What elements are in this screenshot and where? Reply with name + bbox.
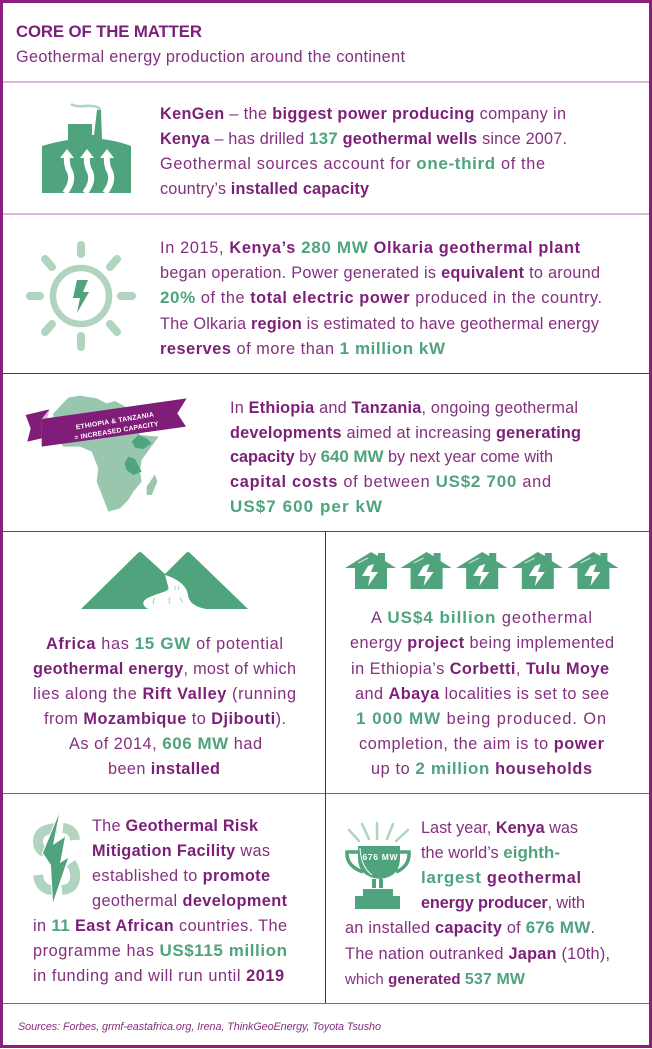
text: KenGen: country’s installed capacity [160, 180, 369, 198]
text: KenGen [160, 105, 567, 198]
text: Olkaria: The Olkaria region is estimated to have geothermal energy [160, 315, 600, 333]
text: Ethiopia and Tanzania: developments aimed at increasing generating [230, 424, 581, 442]
text: Rift Valley: geothermal energy, most of which [33, 660, 296, 678]
ribbon text: ETHIOPIA & TANZANIA [75, 412, 155, 431]
title: CORE OF THE MATTER [16, 22, 202, 41]
text: Rift Valley: been installed [108, 760, 220, 778]
text: Ethiopia project: and Abaya localities is set to see [355, 685, 609, 703]
panel: Risk Mitigation Facility [33, 814, 288, 985]
text: Olkaria: 20% of the total electric power produced in the country. [160, 288, 602, 307]
text: Kenya ranking [344, 819, 610, 988]
text: Kenya ranking: which generated 537 MW [344, 971, 526, 988]
text: Ethiopia and Tanzania: capital costs of between US$2 700 and [230, 472, 551, 491]
icon: five electric houses [345, 552, 618, 589]
text: Risk Mitigation Facility: Mitigation Facility was [92, 842, 270, 860]
text: Rift Valley [33, 634, 296, 778]
subtitle: Geothermal energy production around the continent [16, 48, 405, 66]
text: Kenya ranking: The nation outranked Japan (10th), [345, 945, 610, 963]
ribbon text [72, 411, 160, 442]
text: Ethiopia and Tanzania: In Ethiopia and Tanzania, ongoing geothermal [230, 399, 578, 417]
icon: Africa map with ribbon [26, 396, 187, 512]
sources: Sources: Forbes, grmf-eastafrica.org, Irena, ThinkGeoEnergy, Toyota Tsusho [18, 1021, 381, 1033]
text: Rift Valley: As of 2014, 606 MW had [69, 734, 262, 753]
text: Risk Mitigation Facility: The Geothermal Risk [92, 817, 259, 835]
text: Risk Mitigation Facility: established to promote [92, 867, 270, 885]
ribbon text: = INCREASED CAPACITY [74, 421, 160, 442]
text: Kenya ranking: energy producer, with [421, 894, 585, 912]
title [16, 22, 405, 66]
text: Risk Mitigation Facility: geothermal development [92, 892, 288, 910]
text: Risk Mitigation Facility: programme has US$115 million [33, 941, 287, 960]
text: Kenya ranking: Last year, Kenya was [421, 819, 578, 837]
icon: mountains and river [81, 552, 248, 609]
text: KenGen: Geothermal sources account for one-third of the [160, 154, 545, 173]
text: Ethiopia project: up to 2 million households [371, 759, 592, 778]
text: Ethiopia and Tanzania [230, 399, 581, 516]
icon: trophy [347, 823, 409, 909]
text: Ethiopia project: 1 000 MW being produced. On [356, 709, 606, 728]
text: Ethiopia project: A US$4 billion geothermal [371, 608, 592, 627]
text: Ethiopia project: completion, the aim is to power [359, 735, 605, 753]
icon: sun with bolt [30, 245, 132, 347]
panel: Ethiopia and Tanzania [26, 396, 581, 516]
text: Ethiopia project: energy project being implemented [350, 634, 614, 652]
text: Olkaria: began operation. Power generated is equivalent to around [160, 264, 600, 282]
text: KenGen: KenGen – the biggest power producing company in [160, 105, 566, 123]
text: Kenya ranking: the world’s eighth- [421, 843, 560, 862]
icon: trophy: 676 MW [362, 852, 398, 862]
icon: dollar bolt [38, 814, 75, 902]
text: Risk Mitigation Facility [33, 817, 288, 985]
text: Rift Valley: Africa has 15 GW of potential [46, 634, 283, 653]
panel: Olkaria [30, 238, 602, 358]
text: Olkaria [160, 238, 602, 358]
panel: Rift Valley [33, 552, 296, 778]
panel: Ethiopia project [345, 552, 618, 778]
panel: Kenya ranking [344, 819, 610, 988]
icon: geothermal plant [42, 104, 131, 193]
text: Ethiopia and Tanzania: US$7 600 per kW [230, 497, 383, 516]
text: KenGen: Kenya – has drilled 137 geothermal wells since 2007. [160, 129, 567, 148]
panel: KenGen [42, 104, 567, 198]
text: Ethiopia project [350, 608, 614, 778]
text: Ethiopia project: in Ethiopia’s Corbetti, Tulu Moye [351, 660, 609, 678]
text: Kenya ranking: largest geothermal [421, 868, 581, 887]
text: Risk Mitigation Facility: in 11 East African countries. The [33, 916, 287, 935]
text: Kenya ranking: an installed capacity of 676 MW. [345, 918, 595, 937]
text: Rift Valley: lies along the Rift Valley (running [33, 685, 296, 703]
text: Risk Mitigation Facility: in funding and will run until 2019 [33, 967, 284, 985]
text: Olkaria: In 2015, Kenya’s 280 MW Olkaria geothermal plant [160, 238, 581, 257]
text: Ethiopia and Tanzania: capacity by 640 MW by next year come with [230, 447, 553, 466]
text: Rift Valley: from Mozambique to Djibouti). [44, 710, 286, 728]
text: Olkaria: reserves of more than 1 million kW [160, 339, 446, 358]
